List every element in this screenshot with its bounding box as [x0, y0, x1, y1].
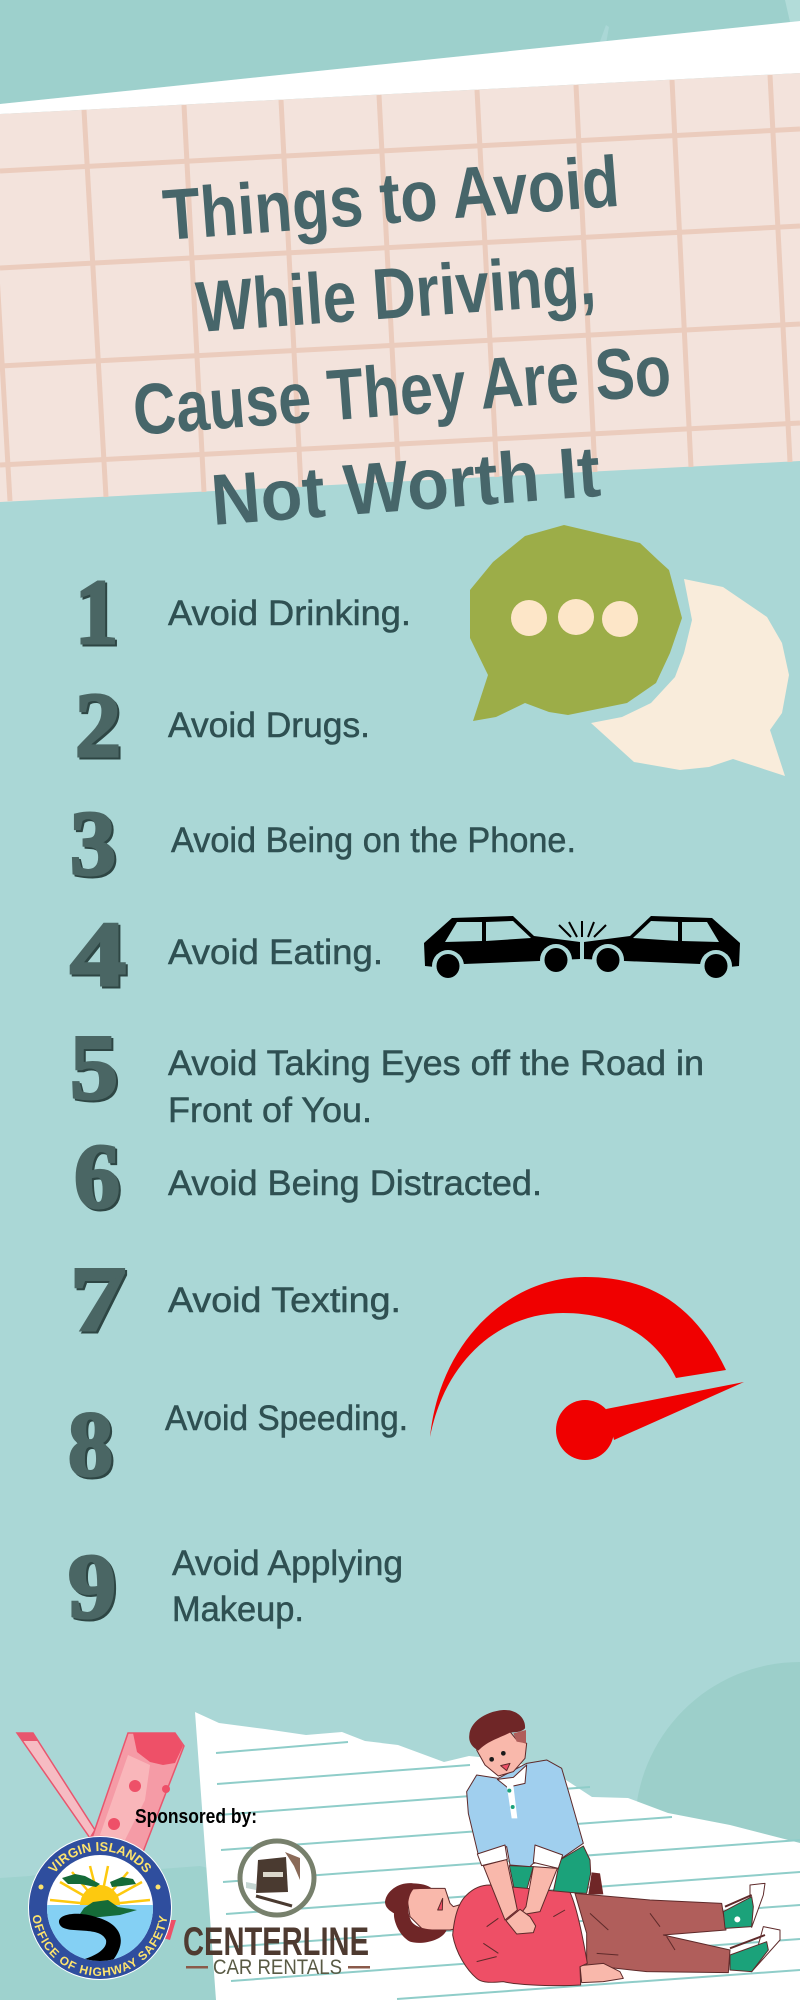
number 6: 6 [74, 1125, 120, 1227]
top header band [0, 0, 800, 114]
item 5 [70, 1016, 704, 1130]
number 4: 4 [70, 903, 126, 1005]
number 5: 5 [72, 1018, 120, 1120]
rescuer lower body [509, 1846, 603, 1894]
number 9: 9 [68, 1535, 116, 1637]
item 7 [70, 1248, 401, 1352]
kneeling rescuer upper body [467, 1710, 583, 1934]
number 7: 7 [70, 1248, 126, 1350]
text: avoid drugs: Avoid Drugs. [168, 706, 370, 745]
number 1: 1 [77, 563, 120, 665]
number 6: 6 [76, 1127, 122, 1229]
text: avoid applying makeup: Makeup. [172, 1590, 304, 1629]
text: avoid taking eyes off the road: Avoid Taking Eyes off the Road in [168, 1044, 704, 1083]
item 1 [75, 561, 411, 665]
text: avoid being distracted: Avoid Being Distracted. [168, 1164, 542, 1203]
text: avoid taking eyes off the road: Front of You. [168, 1091, 372, 1130]
title: Things to Avoid [160, 142, 622, 256]
text: avoid texting: Avoid Texting. [168, 1281, 401, 1320]
title: Not Worth It [208, 432, 603, 541]
number 3: 3 [72, 794, 118, 896]
title: Cause They Are So [130, 331, 674, 451]
item 9 [68, 1535, 403, 1639]
text: avoid eating: Avoid Eating. [168, 933, 383, 972]
title [130, 142, 674, 541]
text: avoid applying makeup [172, 1544, 403, 1629]
illustration: pink ribbon [17, 1733, 184, 1940]
text: avoid drinking: Avoid Drinking. [168, 594, 411, 633]
wordmark: CENTERLINE [183, 1920, 369, 1964]
item 8 [68, 1393, 408, 1497]
item 3 [70, 792, 576, 896]
number 8: 8 [68, 1393, 113, 1495]
number 1: 1 [75, 561, 118, 663]
number 8: 8 [70, 1395, 115, 1497]
text: sponsored by: Sponsored by: [135, 1806, 257, 1828]
illustration: person performing CPR [385, 1710, 780, 1986]
logo: Virgin Islands Office of Highway Safety: VIRGIN ISLANDS [48, 1842, 151, 1872]
lying victim [385, 1883, 780, 1986]
text: avoid being on the phone: Avoid Being on the Phone. [171, 821, 576, 860]
number 4: 4 [72, 905, 128, 1007]
text: avoid taking eyes off the road [168, 1044, 704, 1130]
logo: Virgin Islands Office of Highway Safety [28, 1836, 172, 1980]
icon: speech bubbles [470, 525, 789, 776]
text: avoid speeding: Avoid Speeding. [165, 1399, 408, 1438]
logo: Virgin Islands Office of Highway Safety: OFFICE OF HIGHWAY SAFETY [32, 1915, 167, 1976]
icon: two cars colliding [424, 916, 740, 982]
item 2 [75, 674, 370, 778]
number 5: 5 [70, 1016, 118, 1118]
number 2: 2 [75, 674, 121, 776]
text: avoid applying makeup: Avoid Applying [172, 1544, 403, 1583]
tagline: CAR RENTALS [213, 1956, 342, 1979]
number 2: 2 [77, 676, 123, 778]
jeep badge [240, 1841, 314, 1915]
panel: grid paper behind the title [0, 73, 800, 502]
panel: torn lined paper [195, 1712, 800, 2000]
number 7: 7 [72, 1250, 128, 1352]
item 6 [74, 1125, 542, 1229]
item 4 [70, 903, 383, 1007]
logo: Centerline Car Rentals [183, 1841, 370, 1979]
icon: red speedometer [430, 1277, 744, 1460]
footer background shapes [0, 1662, 800, 2000]
title: While Driving, [193, 240, 598, 348]
number 9: 9 [70, 1537, 118, 1639]
number 3: 3 [70, 792, 116, 894]
